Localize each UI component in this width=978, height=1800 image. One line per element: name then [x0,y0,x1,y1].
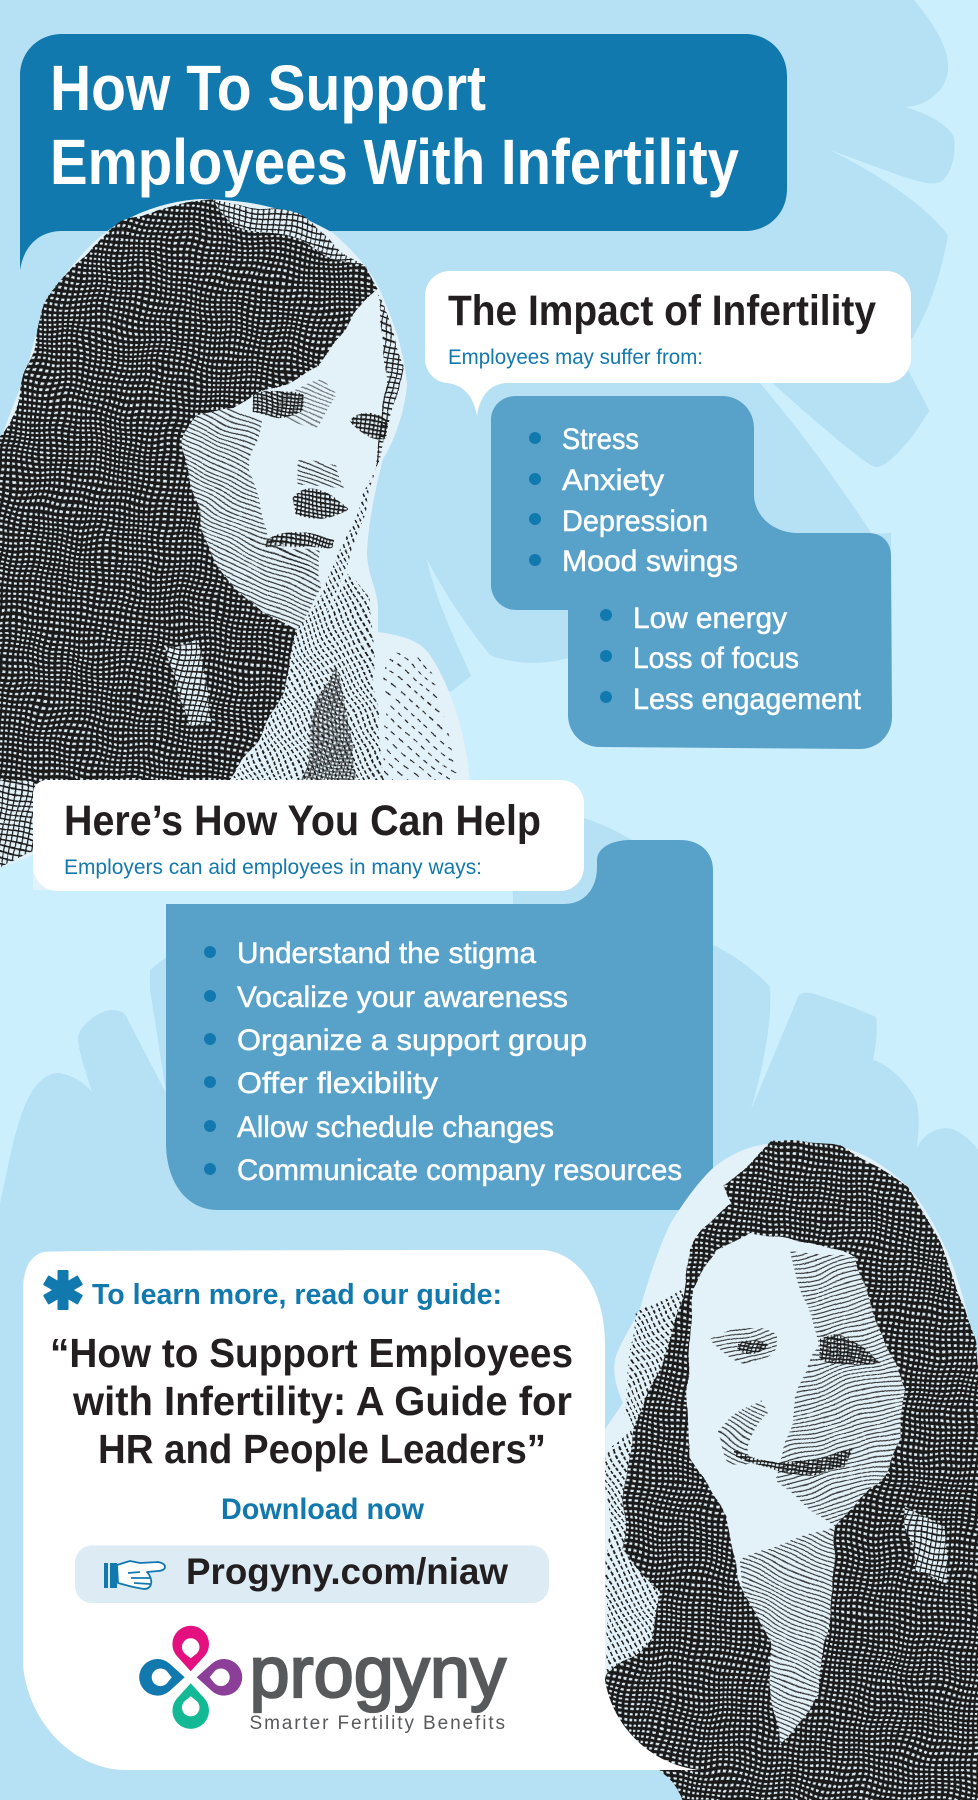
list: ways to help: Vocalize your awareness [237,981,568,1014]
near eye [300,459,345,490]
heading: Here’s How You Can Help [64,797,541,845]
list: symptoms 1: Anxiety [562,464,664,497]
scarf shading [225,570,385,790]
left hair edge [620,1290,683,1429]
panel: impact list [491,396,892,749]
left eye [713,1326,777,1365]
mouth [267,536,333,549]
icon: pointing hand [104,1561,165,1589]
hair lights [903,1506,950,1583]
hair [600,1143,978,1800]
guide title [50,1330,573,1472]
guide title: with Infertility: A Guide for [72,1378,572,1424]
list: symptoms 2: Less engagement [633,683,862,716]
brow [252,390,302,419]
title text [50,52,739,198]
list: symptoms 1: Mood swings [562,545,738,578]
portrait: sad woman [0,199,470,890]
scarf dark fold [300,665,360,790]
list: symptoms 2: Low energy [633,602,787,635]
left hair lower specks [607,1429,660,1672]
lead-in text: To learn more, read our guide: [92,1279,502,1311]
neck hatching [740,1527,837,1745]
panel: help bubble [33,780,584,891]
panel: impact bubble [425,271,911,416]
background leaf: top [0,0,955,700]
logo mark [139,1626,242,1729]
cheek hatching [262,378,338,430]
hair highlight top [215,201,367,270]
list: symptoms 2: Loss of focus [633,642,799,675]
list: ways to help: Communicate company resources [237,1154,682,1187]
panel: help list [166,840,713,1210]
link pill [75,1546,549,1603]
far strand of hair [372,296,403,470]
guide title: HR and People Leaders” [98,1426,546,1472]
hair swath [163,640,213,725]
background leaf: hump behind second heading [513,818,640,905]
list: symptoms 2 [600,602,862,716]
title banner [20,34,787,270]
right eye [818,1334,880,1365]
list: ways to help: Organize a support group [237,1024,587,1057]
shoulder specks [385,650,462,790]
guide title: “How to Support Employees [50,1330,573,1376]
list: symptoms 1: Stress [562,423,639,456]
portrait: smiling woman [600,1143,978,1800]
icon: asterisk [43,1270,83,1310]
background leaf: bottom [0,945,978,1800]
list: symptoms 1 [529,423,738,578]
download label: Download now [221,1493,425,1526]
logo tagline: Smarter Fertility Benefits [250,1713,505,1734]
list: ways to help: Allow schedule changes [237,1111,554,1144]
panel: guide call to action [23,1250,700,1770]
hair [0,201,377,790]
logo [139,1626,506,1734]
list: ways to help: Offer flexibility [237,1067,438,1100]
list: symptoms 1: Depression [562,505,708,538]
smile [735,1446,855,1476]
heading: The Impact of Infertility [448,287,876,335]
jaw strand [295,470,372,630]
list: ways to help [204,937,682,1187]
title text: How To Support [50,52,486,124]
list: ways to help: Understand the stigma [237,937,536,970]
smile crease [717,1400,765,1462]
hair tips bottom left [0,780,33,870]
title text: Employees With Infertility [50,126,739,198]
link text: Progyny.com/niaw [186,1551,508,1592]
face hatching [180,411,320,630]
subheading: Employers can aid employees in many ways: [64,856,482,879]
logo wordmark: progyny [250,1633,506,1713]
subheading: Employees may suffer from: [448,346,703,369]
far eye [350,414,388,438]
face hatching [777,1250,903,1527]
